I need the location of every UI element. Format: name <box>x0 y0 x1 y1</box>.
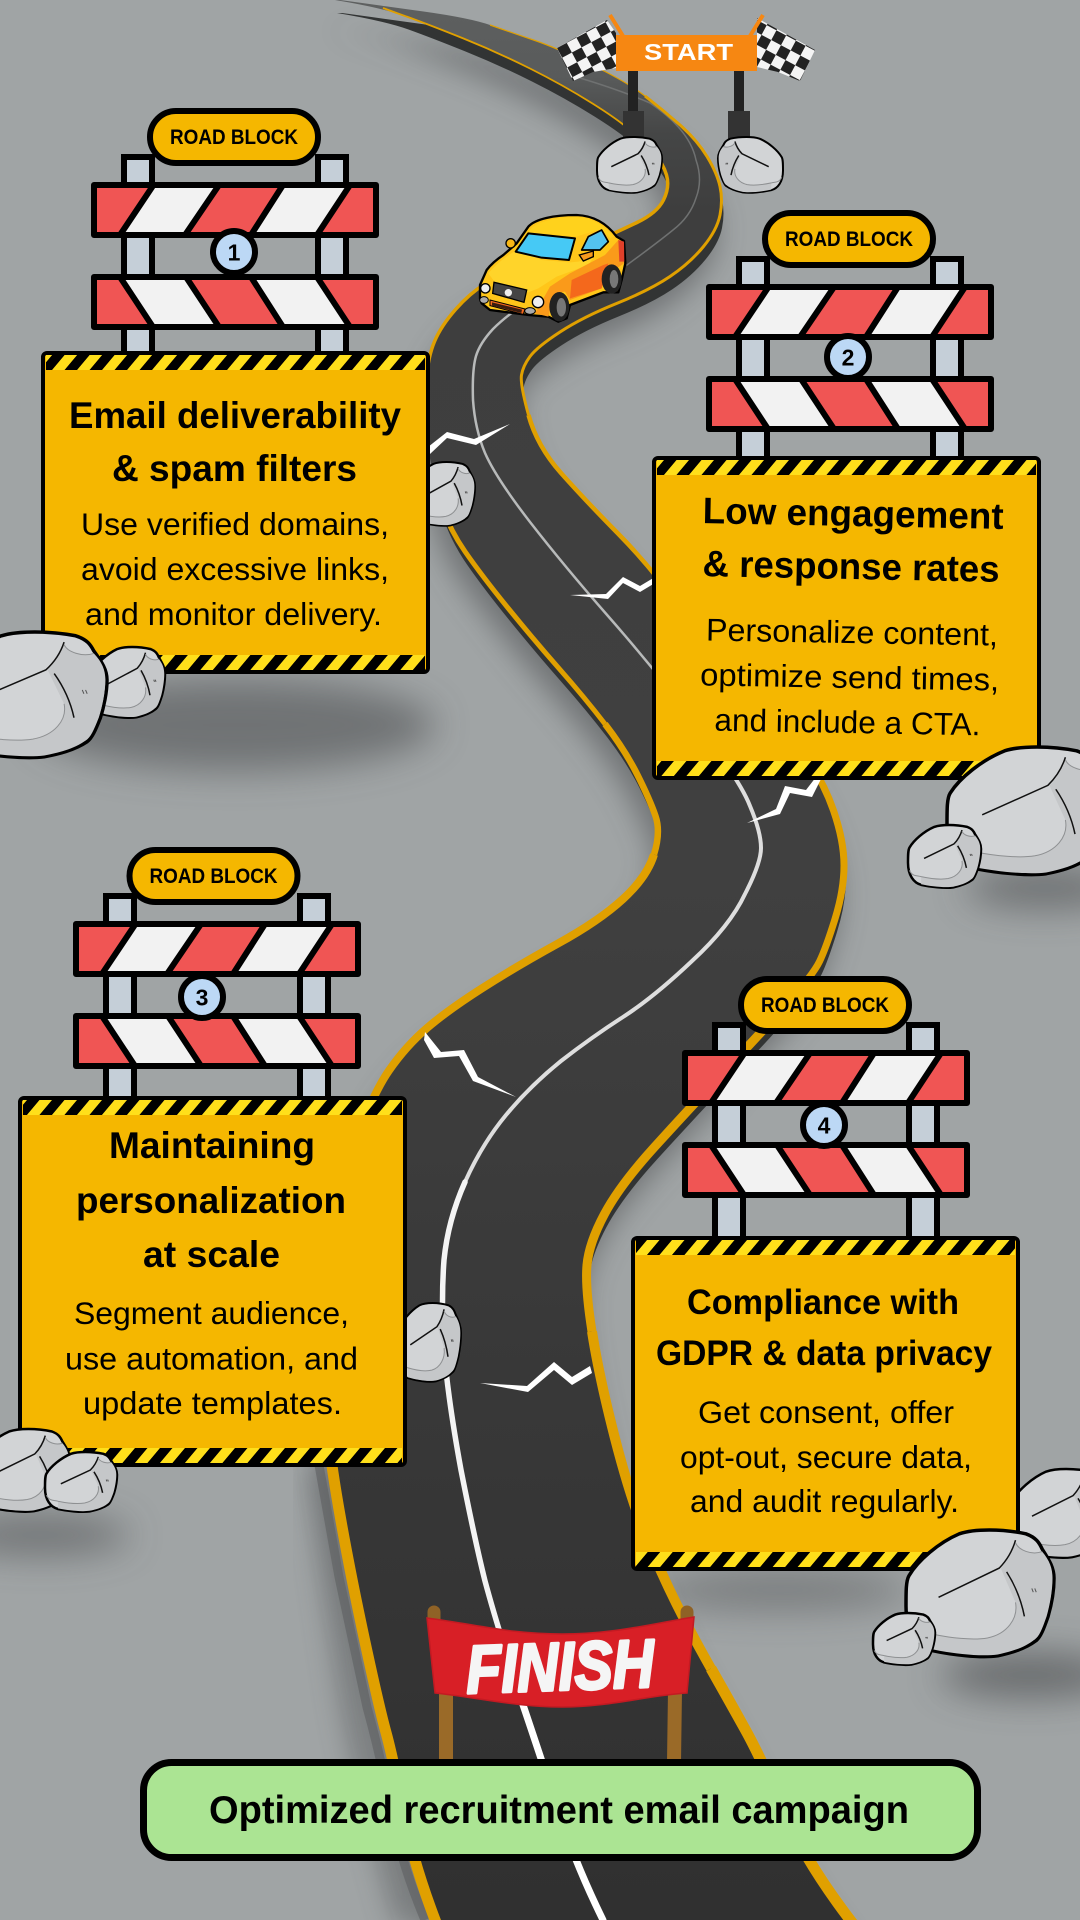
panel: low engagement <box>654 458 1039 778</box>
barrier 2 <box>709 213 991 489</box>
barrier 3 <box>76 850 358 1126</box>
body text 2: Personalize content, <box>706 611 998 653</box>
road block 3 <box>20 850 405 1465</box>
heading 2 <box>701 490 1004 590</box>
boulders: panel 3 <box>0 1429 117 1512</box>
body text 1: avoid excessive links, <box>81 551 389 587</box>
lower left road bank <box>319 1465 425 1920</box>
start boulders <box>597 137 783 193</box>
outcome box <box>144 1762 978 1858</box>
barrier 4 <box>685 979 967 1255</box>
heading 1 <box>69 395 401 489</box>
start sign <box>557 15 815 139</box>
start label: START <box>644 39 733 65</box>
heading 3: Maintaining <box>109 1125 315 1166</box>
heading 4: Compliance with <box>687 1283 959 1322</box>
heading 3 <box>76 1125 346 1275</box>
boulder behind panel 4 <box>1010 1469 1080 1558</box>
body text 4 <box>680 1394 972 1519</box>
body text 2: optimize send times, <box>700 656 1000 698</box>
barrier 1: ROAD BLOCK <box>170 126 298 149</box>
body text 2: and include a CTA. <box>714 702 981 742</box>
panel: compliance <box>633 1238 1018 1569</box>
start banner <box>616 35 757 71</box>
boulders: panel 2 <box>908 747 1080 888</box>
body text 4: Get consent, offer <box>698 1394 954 1430</box>
finish label: FINISH <box>465 1626 657 1708</box>
barrier 1 <box>94 111 376 387</box>
panel: maintaining personalization <box>20 1098 405 1465</box>
road edge lines <box>328 8 854 1920</box>
boulder behind panel 3 <box>396 1303 461 1382</box>
road surface <box>326 0 854 1920</box>
road side thickness <box>328 13 856 1920</box>
road cracks <box>424 424 821 1392</box>
body text 3: Segment audience, <box>74 1295 349 1331</box>
heading 1: Email deliverability <box>69 395 401 436</box>
body text 2 <box>699 611 1000 743</box>
icon: yellow car <box>480 215 625 322</box>
body text 3: update templates. <box>83 1385 342 1421</box>
heading 2: & response rates <box>702 543 1000 590</box>
finish poles <box>434 1612 687 1762</box>
center line <box>442 78 761 1920</box>
barrier 4: 4 <box>818 1112 831 1138</box>
boulder behind panel 1 <box>410 462 475 526</box>
heading 2: Low engagement <box>702 490 1004 537</box>
finish cloth <box>427 1617 694 1707</box>
barrier 4: ROAD BLOCK <box>761 994 889 1017</box>
road block 4 <box>633 979 1018 1569</box>
body text 1: Use verified domains, <box>81 506 389 542</box>
body text 1 <box>81 506 389 632</box>
boulders: panel 4 <box>873 1530 1054 1665</box>
finish banner <box>427 1612 694 1762</box>
body text 3 <box>65 1295 358 1421</box>
body text 4: opt-out, secure data, <box>680 1439 972 1475</box>
heading 3: at scale <box>143 1234 280 1275</box>
road <box>319 0 856 1920</box>
road block 2 <box>654 213 1039 778</box>
heading 3: personalization <box>76 1180 346 1221</box>
heading 4: GDPR & data privacy <box>656 1334 993 1373</box>
barrier 2: ROAD BLOCK <box>785 228 913 251</box>
body text 1: and monitor delivery. <box>85 596 382 632</box>
outcome label: Optimized recruitment email campaign <box>209 1789 909 1832</box>
checkered flags <box>557 15 815 81</box>
heading 1: & spam filters <box>112 448 357 489</box>
barrier 2: 2 <box>842 344 854 370</box>
road block 1 <box>43 111 428 672</box>
boulders: panel 1 <box>0 632 165 758</box>
barrier 1: 1 <box>228 240 241 266</box>
barrier 3: 3 <box>196 984 208 1010</box>
barrier 3: ROAD BLOCK <box>150 865 278 888</box>
body text 4: and audit regularly. <box>690 1483 959 1519</box>
body text 3: use automation, and <box>65 1340 358 1376</box>
heading 4 <box>656 1283 993 1373</box>
panel: email deliverability <box>43 353 428 672</box>
start posts <box>623 70 750 139</box>
